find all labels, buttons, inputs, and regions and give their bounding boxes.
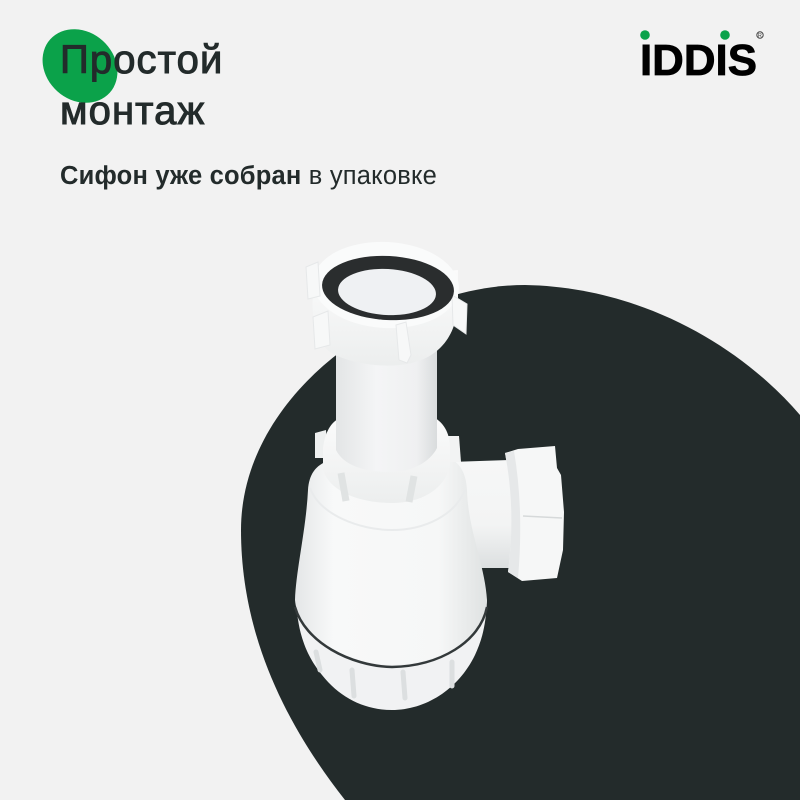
vertical pipe <box>336 340 437 472</box>
side nut <box>505 446 564 581</box>
icon: siphon product <box>295 238 564 710</box>
black seal <box>295 607 487 667</box>
top nut <box>306 238 467 366</box>
black gasket <box>320 253 456 323</box>
lower collar with lugs <box>315 418 461 503</box>
title: монтаж <box>60 89 205 133</box>
side pipe <box>450 460 520 568</box>
title <box>60 38 223 133</box>
lugs <box>306 262 467 363</box>
shoulder highlight <box>310 488 465 530</box>
dark background shape <box>241 285 800 800</box>
logo: IDDIS <box>640 36 757 85</box>
title: Простой <box>60 38 223 82</box>
bottle body <box>295 458 487 665</box>
pipe opening <box>337 266 437 318</box>
subtitle: Сифон уже собран в упаковке <box>60 162 437 190</box>
logo: R <box>758 33 762 39</box>
green blob <box>28 14 132 118</box>
lower cup <box>296 600 487 710</box>
